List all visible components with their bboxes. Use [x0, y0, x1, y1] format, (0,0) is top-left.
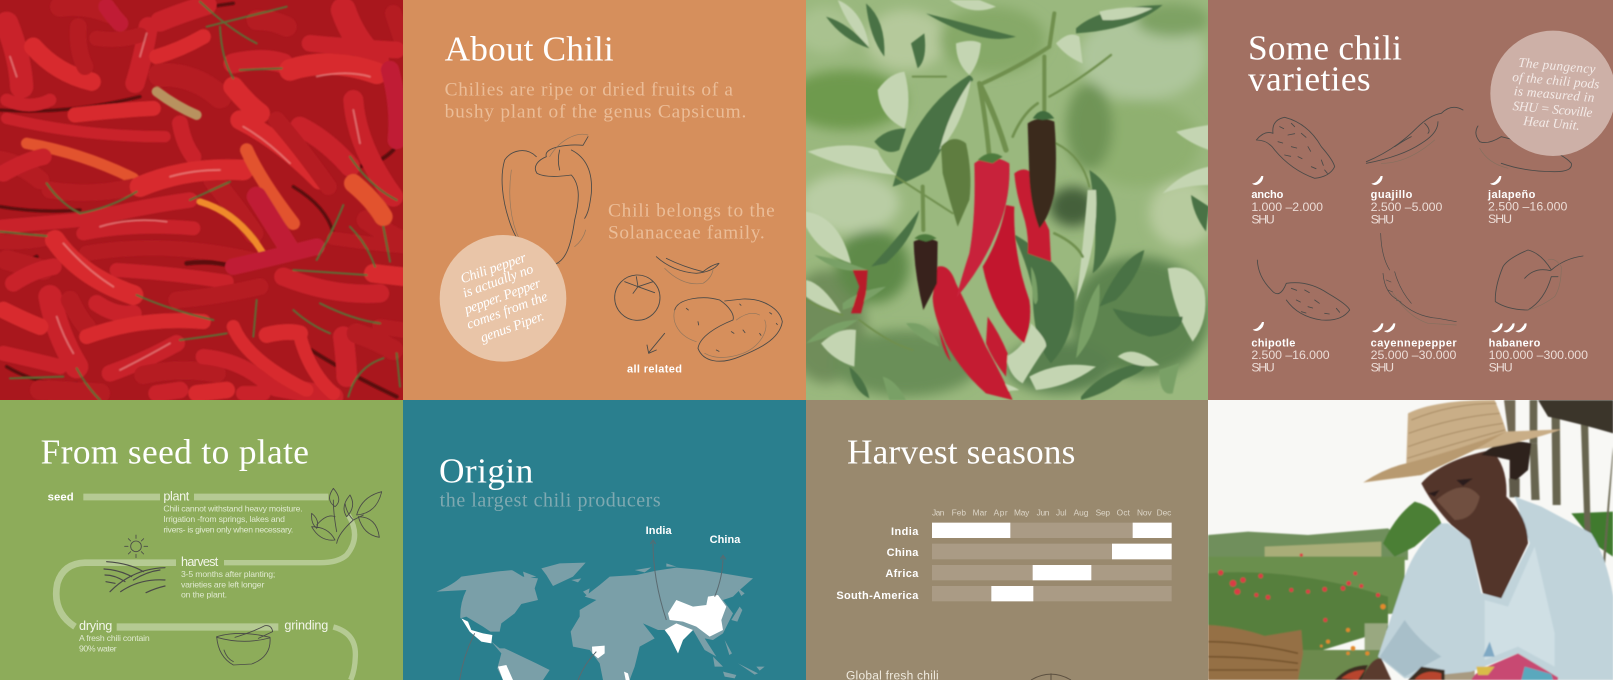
- text: drying step: drying: [79, 619, 112, 633]
- axis: months: Aug: [1074, 507, 1089, 517]
- callout: chili pepper note: Chili pepper: [459, 251, 529, 287]
- text: grinding step: grinding: [284, 618, 328, 632]
- text: harvest step: varieties are left longer: [181, 579, 264, 589]
- label: chipotle: chipotle: [1251, 338, 1295, 350]
- label: habanero: 100.000 –300.000: [1489, 348, 1588, 362]
- icon: globe fragment: [1031, 673, 1071, 680]
- text: harvest step: 3-5 months after planting;: [181, 569, 275, 579]
- icon: chili plant leaves: [312, 488, 382, 543]
- text: harvest step: harvest: [181, 555, 219, 569]
- label: ancho: SHU: [1251, 213, 1275, 227]
- row: China: China: [887, 547, 919, 559]
- text: chili definition: bushy plant of the genus Capsicum.: [445, 102, 746, 123]
- text: harvest step: [181, 555, 275, 600]
- text: plant step: rivers- is given only when necessary.: [163, 525, 293, 535]
- panel: harvest seasons: [806, 400, 1209, 680]
- panel: from seed to plate: [0, 400, 403, 680]
- text: plant step: [163, 490, 303, 535]
- label: jalapeno: jalapeño: [1487, 189, 1536, 201]
- label: guajillo: [1371, 176, 1442, 227]
- callout: scoville note: [1490, 31, 1613, 156]
- text: drying step: [79, 620, 150, 652]
- panel: chili plant photo: [786, 0, 1216, 400]
- axis: months: Jan: [932, 507, 945, 517]
- axis: months: May: [1014, 507, 1030, 517]
- arrows: producer callouts: [460, 540, 726, 680]
- sketch: guajillo: [1366, 107, 1463, 163]
- label: India: India: [646, 525, 673, 537]
- text: solanaceae family: [608, 201, 775, 243]
- callout: scoville note: The pungency: [1518, 55, 1596, 76]
- panel: some chili varieties: [1208, 0, 1613, 400]
- heading: Some chili varieties: varieties: [1248, 60, 1371, 99]
- text: seed step: seed: [48, 492, 74, 504]
- text: plant step: Chili cannot withstand heavy moisture.: [163, 503, 303, 513]
- sketch: ancho: [1256, 117, 1335, 178]
- sketch: habanero: [1495, 250, 1583, 310]
- label: chipotle: SHU: [1251, 361, 1275, 375]
- axis: months: Jun: [1037, 507, 1050, 517]
- icon: related plants sketch: [615, 257, 782, 361]
- axis: months: Dec: [1157, 507, 1171, 517]
- icon: mortar and pestle: [217, 626, 273, 665]
- label: ancho: ancho: [1251, 189, 1284, 201]
- label: jalapeno: 2.500 –16.000: [1488, 199, 1567, 213]
- label: habanero: [1489, 323, 1588, 375]
- axis: months: Oct: [1117, 507, 1131, 517]
- icon: sun: [125, 535, 148, 558]
- sketch: cayenne pepper: [1381, 233, 1456, 325]
- sketch: jalapeno: [1476, 126, 1571, 172]
- label: guajillo: SHU: [1371, 213, 1394, 227]
- axis: months: Apr: [994, 507, 1008, 517]
- panel: red chili photo: [0, 0, 403, 400]
- callout: chili pepper note: genus Piper.: [479, 309, 546, 346]
- label: all related: all related: [627, 363, 682, 375]
- label: cayennepepper: SHU: [1371, 361, 1394, 375]
- text: chili definition: Chilies are ripe or dried fruits of a: [445, 80, 733, 101]
- row: India: [891, 523, 1172, 538]
- label: ancho: 1.000 –2.000: [1251, 200, 1323, 214]
- text: drying step: 90% water: [79, 643, 117, 653]
- sketch: chipotle: [1257, 260, 1350, 320]
- callout: chili pepper note: pepper. Pepper: [462, 276, 543, 318]
- callout: scoville note: of the chili pods: [1512, 69, 1600, 92]
- heading: Harvest seasons: Harvest seasons: [847, 432, 1075, 471]
- panel: origin: [403, 400, 806, 680]
- panel: about chili: [403, 0, 806, 400]
- callout: scoville note: Heat Unit.: [1522, 113, 1580, 133]
- callout: scoville note: SHU = Scoville: [1512, 98, 1593, 120]
- map: highlighted producers: [461, 595, 726, 680]
- label: ancho: [1251, 176, 1323, 227]
- heading: From seed to plate: From seed to plate: [41, 432, 309, 471]
- panel: farmer photo: [1208, 400, 1613, 680]
- text: solanaceae family: Solanaceae family.: [608, 222, 765, 243]
- row: China: [887, 544, 1172, 559]
- label: cayennepepper: cayennepepper: [1371, 338, 1457, 350]
- axis: months: Sep: [1096, 507, 1110, 517]
- axis: months: Mar: [973, 507, 987, 517]
- heading: Some chili varieties: [1248, 28, 1402, 99]
- row: South-America: [836, 586, 1172, 602]
- row: Africa: Africa: [885, 568, 919, 580]
- label: guajillo: 2.500 –5.000: [1371, 200, 1442, 214]
- heading: Origin: Origin: [439, 452, 534, 491]
- heading: Some chili varieties: Some chili: [1248, 28, 1402, 67]
- text: plant step: Irrigation -from springs, lakes and: [163, 514, 285, 524]
- axis: months: Jul: [1056, 507, 1067, 517]
- text: drying step: A fresh chili contain: [79, 633, 150, 643]
- subtitle: largest producers: the largest chili producers: [440, 490, 661, 512]
- icon: bell pepper sketch: [502, 134, 592, 265]
- row: India: India: [891, 526, 919, 538]
- callout: chili pepper note: [440, 235, 566, 362]
- chart: harvest calendar: [836, 507, 1172, 602]
- icon: field: [104, 562, 165, 593]
- label: chipotle: [1251, 322, 1330, 375]
- label: cayennepepper: [1371, 323, 1457, 375]
- label: chipotle: 2.500 –16.000: [1251, 348, 1330, 362]
- axis: months: [932, 510, 1171, 517]
- text: chili definition: [445, 80, 746, 123]
- axis: months: Feb: [952, 507, 966, 517]
- row: Africa: [885, 565, 1172, 580]
- label: China: China: [710, 534, 741, 546]
- callout: chili pepper note: is actually no: [461, 262, 536, 301]
- map: world map: [436, 563, 765, 680]
- label: guajillo: guajillo: [1371, 189, 1413, 201]
- row: South-America: South-America: [836, 590, 919, 602]
- label: cayennepepper: 25.000 –30.000: [1371, 348, 1456, 362]
- label: jalapeno: [1487, 176, 1567, 226]
- path: process ribbon: [56, 497, 355, 680]
- text: plant step: plant: [163, 490, 190, 504]
- label: habanero: SHU: [1489, 361, 1513, 375]
- label: habanero: habanero: [1489, 338, 1541, 350]
- heading: About Chili: About Chili: [445, 30, 614, 69]
- callout: scoville note: is measured in: [1513, 83, 1595, 105]
- text: solanaceae family: Chili belongs to the: [608, 201, 775, 222]
- text: harvest step: on the plant.: [181, 590, 227, 600]
- axis: months: Nov: [1137, 507, 1152, 517]
- callout: chili pepper note: comes from the: [465, 290, 550, 333]
- label: jalapeno: SHU: [1488, 212, 1512, 226]
